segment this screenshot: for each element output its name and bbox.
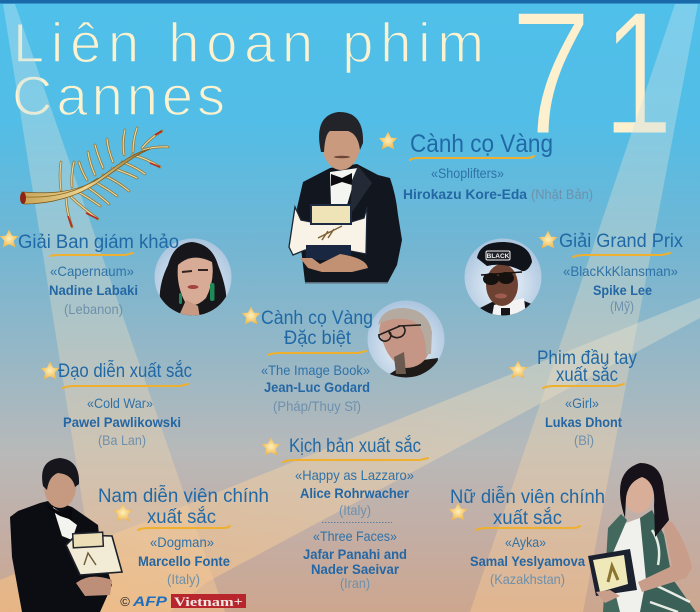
award: Cành cọ Vàng: (Nhật Bản): [531, 186, 593, 202]
winner: Samal Yeslyamova: [470, 553, 585, 569]
film: «BlacKkKlansman»: [563, 263, 678, 279]
film: «Shoplifters»: [431, 165, 504, 181]
heading: Đạo diễn xuất sắc: [58, 360, 192, 382]
heading: Nữ diễn viên chính: [450, 486, 605, 508]
heading: Kịch bản xuất sắc: [289, 435, 421, 457]
photo: Hirokazu Kore-Eda: [289, 112, 402, 284]
award: Phim đầu tay xuất sắc: [508, 348, 637, 448]
photo: Spike Lee: BLACK: [487, 253, 510, 260]
heading: Cành cọ Vàng: [410, 130, 553, 158]
award: Kịch bản xuất sắc: Nader Saeivar: [311, 561, 400, 577]
star icon: [0, 230, 18, 248]
award: Nam diễn viên chính xuất sắc: (Italy): [167, 571, 200, 587]
award: Nữ diễn viên chính xuất sắc: xuất sắc: [493, 507, 562, 529]
top bar: [0, 0, 700, 4]
film: «Cold War»: [87, 395, 153, 411]
star icon: [242, 306, 260, 324]
film: «Girl»: [565, 395, 599, 411]
heading: Cành cọ Vàng: [261, 308, 373, 329]
winner two: Jafar Panahi and: [303, 546, 407, 562]
award: Nữ diễn viên chính xuất sắc: [448, 486, 605, 587]
award: Giải Ban giám khảo: [0, 230, 179, 317]
winner: Jean-Luc Godard: [264, 379, 370, 395]
winner one: Alice Rohrwacher: [300, 485, 410, 501]
award: Kịch bản xuất sắc: (Iran): [340, 575, 370, 591]
winner: Marcello Fonte: [138, 553, 230, 569]
award: Phim đầu tay xuất sắc: xuất sắc: [556, 364, 618, 386]
film: «Dogman»: [150, 534, 214, 550]
photo: Spike Lee: [464, 238, 542, 316]
award: Nữ diễn viên chính xuất sắc: (Kazakhstan): [490, 571, 565, 587]
award: Kịch bản xuất sắc: [262, 435, 428, 591]
award: Cành cọ Vàng Đặc biệt: (Pháp/Thụy Sĩ): [273, 398, 361, 414]
award: Cành cọ Vàng Đặc biệt: [242, 306, 373, 414]
winner: Hirokazu Kore-Eda: [403, 186, 527, 202]
icon: golden palm: [20, 128, 168, 227]
film: «Ayka»: [505, 534, 546, 550]
award: Đạo diễn xuất sắc: (Ba Lan): [98, 432, 146, 448]
film: «The Image Book»: [261, 362, 370, 378]
award: Nam diễn viên chính xuất sắc: xuất sắc: [147, 506, 216, 528]
film: «Capernaum»: [50, 263, 134, 279]
photo: Jean-Luc Godard: [368, 300, 444, 385]
title: Cannes: [12, 64, 225, 127]
title: [12, 11, 484, 127]
star icon: [262, 438, 280, 456]
star icon: [448, 502, 468, 520]
heading: Nam diễn viên chính: [98, 485, 269, 507]
photo: Nadine Labaki: [154, 238, 232, 320]
edition number 71: [510, 0, 673, 172]
award: Giải Ban giám khảo: (Lebanon): [64, 301, 123, 317]
star icon: [114, 504, 132, 522]
winner: Lukas Dhont: [545, 414, 622, 430]
award: Cành cọ Vàng Đặc biệt: Đặc biệt: [284, 328, 352, 349]
photo: Samal Yeslyamova: [588, 463, 696, 612]
title: Liên hoan phim: [13, 11, 484, 74]
photo: Marcello Fonte: [10, 458, 122, 612]
film one: «Happy as Lazzaro»: [295, 467, 414, 483]
winner: Pawel Pawlikowski: [63, 414, 181, 430]
credits: AFP and Vietnam+ logos: AFP: [132, 593, 168, 609]
winner: Spike Lee: [593, 282, 652, 298]
winner: Nadine Labaki: [49, 282, 138, 298]
heading: Giải Ban giám khảo: [18, 232, 179, 253]
award: Kịch bản xuất sắc: (Italy): [339, 502, 371, 518]
star icon: [538, 230, 558, 248]
star icon: [378, 132, 398, 150]
heading: Giải Grand Prix: [559, 231, 683, 252]
award: Phim đầu tay xuất sắc: (Bỉ): [574, 432, 594, 448]
credits: AFP and Vietnam+ logos: Vietnam+: [174, 594, 243, 609]
heading: Phim đầu tay: [537, 348, 637, 369]
star icon: [40, 362, 60, 380]
award: Đạo diễn xuất sắc: [40, 360, 192, 448]
film two: «Three Faces»: [313, 528, 397, 544]
star icon: [508, 360, 528, 378]
credits: AFP and Vietnam+ logos: ©: [120, 594, 130, 609]
award: Cành cọ Vàng: [378, 130, 593, 202]
credits: AFP and Vietnam+ logos: [120, 593, 246, 609]
award: Giải Grand Prix: [538, 230, 683, 314]
award: Nam diễn viên chính xuất sắc: [98, 485, 269, 587]
award: Giải Grand Prix: (Mỹ): [610, 298, 634, 314]
